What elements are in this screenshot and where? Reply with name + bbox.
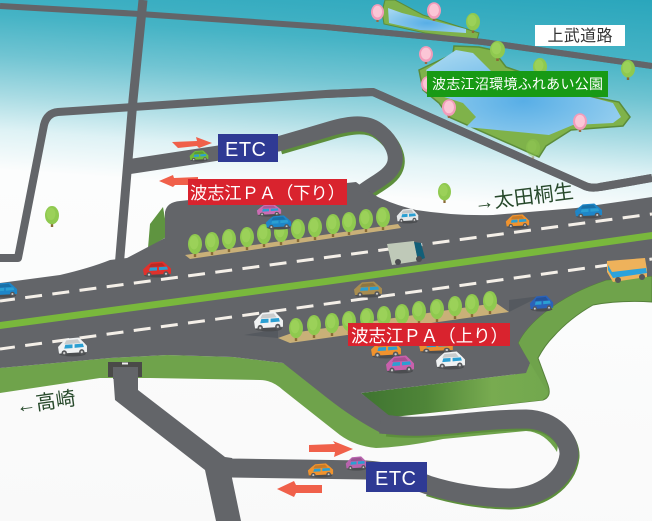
- label: Hasuga PA up: 波志江ＰＡ（上り）: [351, 326, 508, 346]
- bus: [607, 258, 647, 283]
- upper ramp road: [127, 124, 395, 192]
- label: ETC north: [218, 134, 278, 162]
- green wedge beside ramp: [361, 363, 548, 417]
- label: Joubu road: [535, 25, 625, 46]
- lower ramp road: [222, 419, 569, 498]
- median strip: [0, 232, 652, 329]
- expressway and parking areas: [0, 182, 652, 434]
- background roads: [0, 0, 652, 268]
- label: ETC south: [366, 462, 427, 492]
- label: ETC south: ETC: [375, 468, 416, 490]
- arrow: leaving to left, up PA: [277, 481, 322, 497]
- lower pond park: [419, 46, 630, 157]
- truck: [387, 241, 425, 265]
- vehicles: [0, 150, 602, 478]
- access road from underpass: [113, 372, 241, 521]
- green wedge down PA: [148, 207, 168, 248]
- right loop road to the pond: [326, 92, 652, 188]
- underpass: [108, 362, 142, 379]
- tree strip: up PA: [244, 291, 541, 343]
- upper pond park: [382, 0, 479, 40]
- green embankment east of up PA: [389, 276, 652, 417]
- label: park: [427, 71, 608, 97]
- lane dashes: [0, 214, 652, 349]
- arrow: entering ETC, down PA: [172, 137, 212, 148]
- arrow: leaving to left, down PA: [159, 175, 198, 187]
- label: park: 波志江沼環境ふれあい公園: [432, 76, 603, 92]
- pond trees: [45, 2, 635, 227]
- green embankment south of expressway: [0, 355, 558, 452]
- direction label: Takasaki: ←高崎: [14, 387, 77, 418]
- road 上武道路 over pond: [326, 27, 652, 66]
- upper ramp edge: [280, 127, 397, 195]
- lower ramp outer edge: [387, 421, 570, 500]
- tree strip: down PA: [185, 207, 401, 259]
- label: Hasuga PA down: 波志江ＰＡ（下り）: [190, 183, 345, 203]
- arrow: entering ETC, up PA: [309, 441, 353, 457]
- direction label: Ota Kiryu: →太田桐生: [473, 180, 575, 215]
- label: Joubu road: 上武道路: [548, 27, 612, 45]
- label: ETC north: ETC: [225, 139, 266, 161]
